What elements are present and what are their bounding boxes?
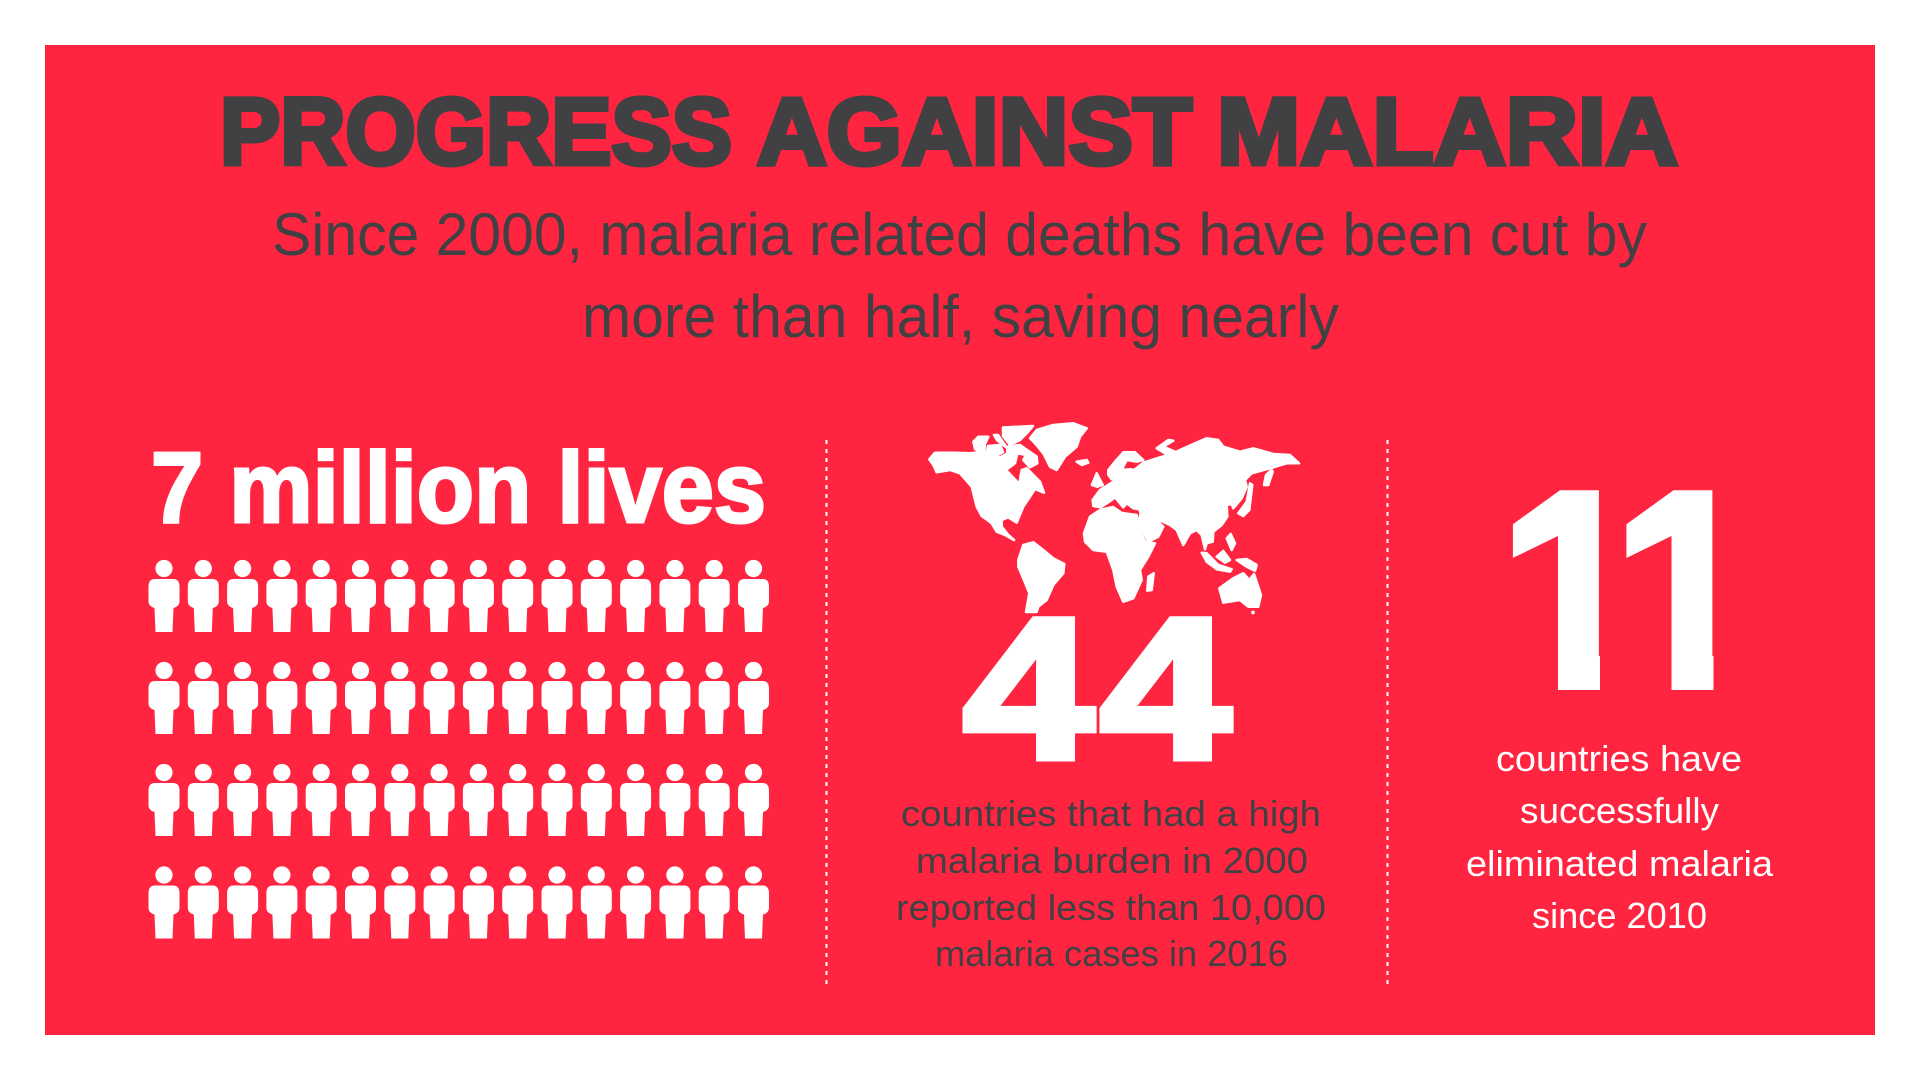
text: 44 countries: malaria burden in 2000: [916, 840, 1308, 881]
title: PROGRESS: [220, 79, 732, 185]
subtitle: more than half, saving nearly: [582, 283, 1339, 350]
subtitle: Since 2000, malaria related deaths have been cut by: [272, 201, 1647, 268]
icon: world map: [929, 423, 1299, 613]
text: 11 countries: countries have: [1496, 738, 1742, 779]
big number 44: 4: [1100, 577, 1231, 801]
text: 11 countries: [1466, 738, 1774, 936]
subtitle: [272, 201, 1647, 350]
text: 44 countries: reported less than 10,000: [896, 887, 1326, 928]
text: 44 countries: countries that had a high: [901, 793, 1321, 834]
big number 44: 4: [963, 577, 1094, 801]
text: 11 countries: since 2010: [1532, 895, 1707, 936]
text: 11 countries: eliminated malaria: [1466, 843, 1774, 884]
text: 44 countries: malaria cases in 2016: [935, 933, 1288, 974]
text: 11 countries: successfully: [1520, 790, 1719, 831]
title: [220, 79, 1678, 185]
big number 11: 1: [1614, 435, 1755, 751]
title: AGAINST: [757, 79, 1192, 185]
text: 44 countries: [896, 793, 1326, 974]
big number 44: [963, 577, 1231, 801]
big number 11: [1512, 490, 1714, 690]
big number 11: 1: [1500, 435, 1642, 751]
title: MALARIA: [1217, 79, 1678, 185]
pictogram: rows of people: [148, 560, 769, 938]
heading: 7 million lives: 7 million lives: [151, 432, 766, 544]
